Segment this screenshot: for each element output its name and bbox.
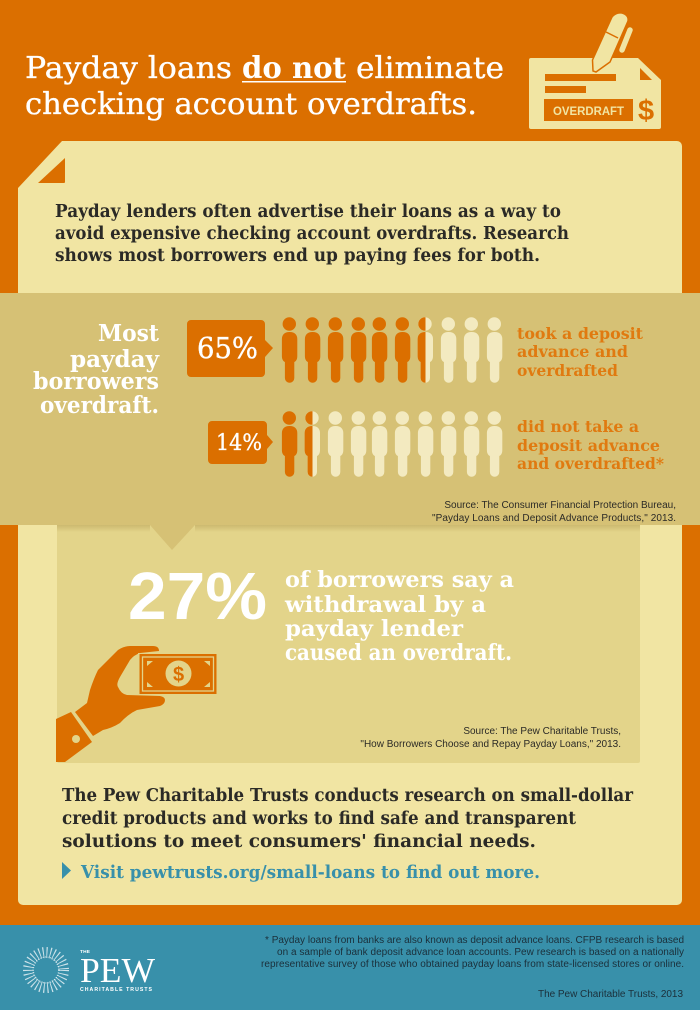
heading: most payday borrowers overdraft: payday [70,346,160,373]
title [25,51,504,122]
callout: 65 percent: 65% [197,331,258,365]
heading: most payday borrowers overdraft [33,320,160,419]
label: did not take a deposit advance: deposit advance [517,436,660,455]
text: Pew research statement: credit products and works to find safe and transparent [62,809,576,829]
source: Pew: Source: The Pew Charitable Trusts, [463,726,621,737]
logo: Pew wordmark: PEW [80,951,155,990]
icon: hand holding dollar bill: $ [173,664,184,686]
label: did not take a deposit advance [517,417,664,473]
pictogram: 14 percent of people [282,411,502,477]
label: did not take a deposit advance: did not take a [517,417,639,436]
heading: most payday borrowers overdraft: Most [98,320,159,347]
text: Pew research statement [62,786,634,852]
panel: 27 percent box [57,520,640,763]
intro text [55,202,569,266]
logo: Pew sunburst [28,952,64,988]
text: borrowers say a withdrawal: of borrowers say a [285,567,514,593]
title: do not [242,51,346,86]
footnote: representative survey of those who obtained payday loans from state-licensed stores or online. [261,959,684,970]
callout: 14 percent [208,421,273,464]
text: borrowers say a withdrawal [284,567,514,666]
title: eliminate [356,51,504,86]
icon: overdraft check and pen: OVERDRAFT [553,104,625,118]
icon: folded corner [38,158,65,183]
footnote: * Payday loans from banks are also known as deposit advance loans. CFPB research is based [265,935,684,946]
label: did not take a deposit advance: and overdrafted* [517,454,664,473]
source: CFPB: "Payday Loans and Deposit Advance Products," 2013. [432,513,676,524]
heading: most payday borrowers overdraft: overdraft. [40,392,159,419]
panel: paper note [18,141,682,905]
panel: overdraft band [0,293,700,550]
heading: most payday borrowers overdraft: borrowers [33,368,159,395]
text: borrowers say a withdrawal: withdrawal by a [284,592,486,618]
footnote: on a sample of bank deposit advance loan accounts. Pew research is based on a nationally [277,947,684,958]
icon: hand holding dollar bill [56,646,218,762]
footnote [261,935,684,1000]
intro text: Payday lenders often advertise their loans as a way to [55,202,561,222]
label: took a deposit advance: took a deposit [517,324,644,343]
source: Pew: "How Borrowers Choose and Repay Payday Loans," 2013. [360,739,621,750]
source: CFPB [432,500,676,524]
pictogram: 65 percent of people [282,317,502,383]
title: Payday loans [25,51,232,86]
logo: Pew wordmark: CHARITABLE TRUSTS [80,987,153,993]
text: borrowers say a withdrawal: caused an overdraft. [285,640,512,666]
source: CFPB: Source: The Consumer Financial Protection Bureau, [444,500,676,511]
logo: Pew wordmark: THE [80,949,91,955]
text: borrowers say a withdrawal: payday lender [285,616,463,642]
text: Pew research statement: The Pew Charitable Trusts conducts research on small-dollar [62,786,634,806]
big number: 27 percent: 27% [128,559,267,634]
footer band [0,925,700,1010]
icon: overdraft check and pen: $ [638,95,654,127]
callout: 14 percent: 14% [216,431,262,456]
icon: overdraft check and pen [529,13,661,129]
label: took a deposit advance [517,324,644,380]
link: visit pewtrusts: Visit pewtrusts.org/small-loans to find out more. [80,862,540,883]
callout: 65 percent [187,320,273,377]
source: Pew [360,726,621,750]
label: took a deposit advance: advance and [517,342,628,361]
text: Pew research statement: solutions to meet consumers' financial needs. [62,832,536,852]
intro text: shows most borrowers end up paying fees for both. [55,246,540,266]
title: checking account overdrafts. [25,87,477,122]
footnote: The Pew Charitable Trusts, 2013 [538,989,683,1000]
intro text: avoid expensive checking account overdrafts. Research [55,224,569,244]
label: took a deposit advance: overdrafted [517,361,618,380]
